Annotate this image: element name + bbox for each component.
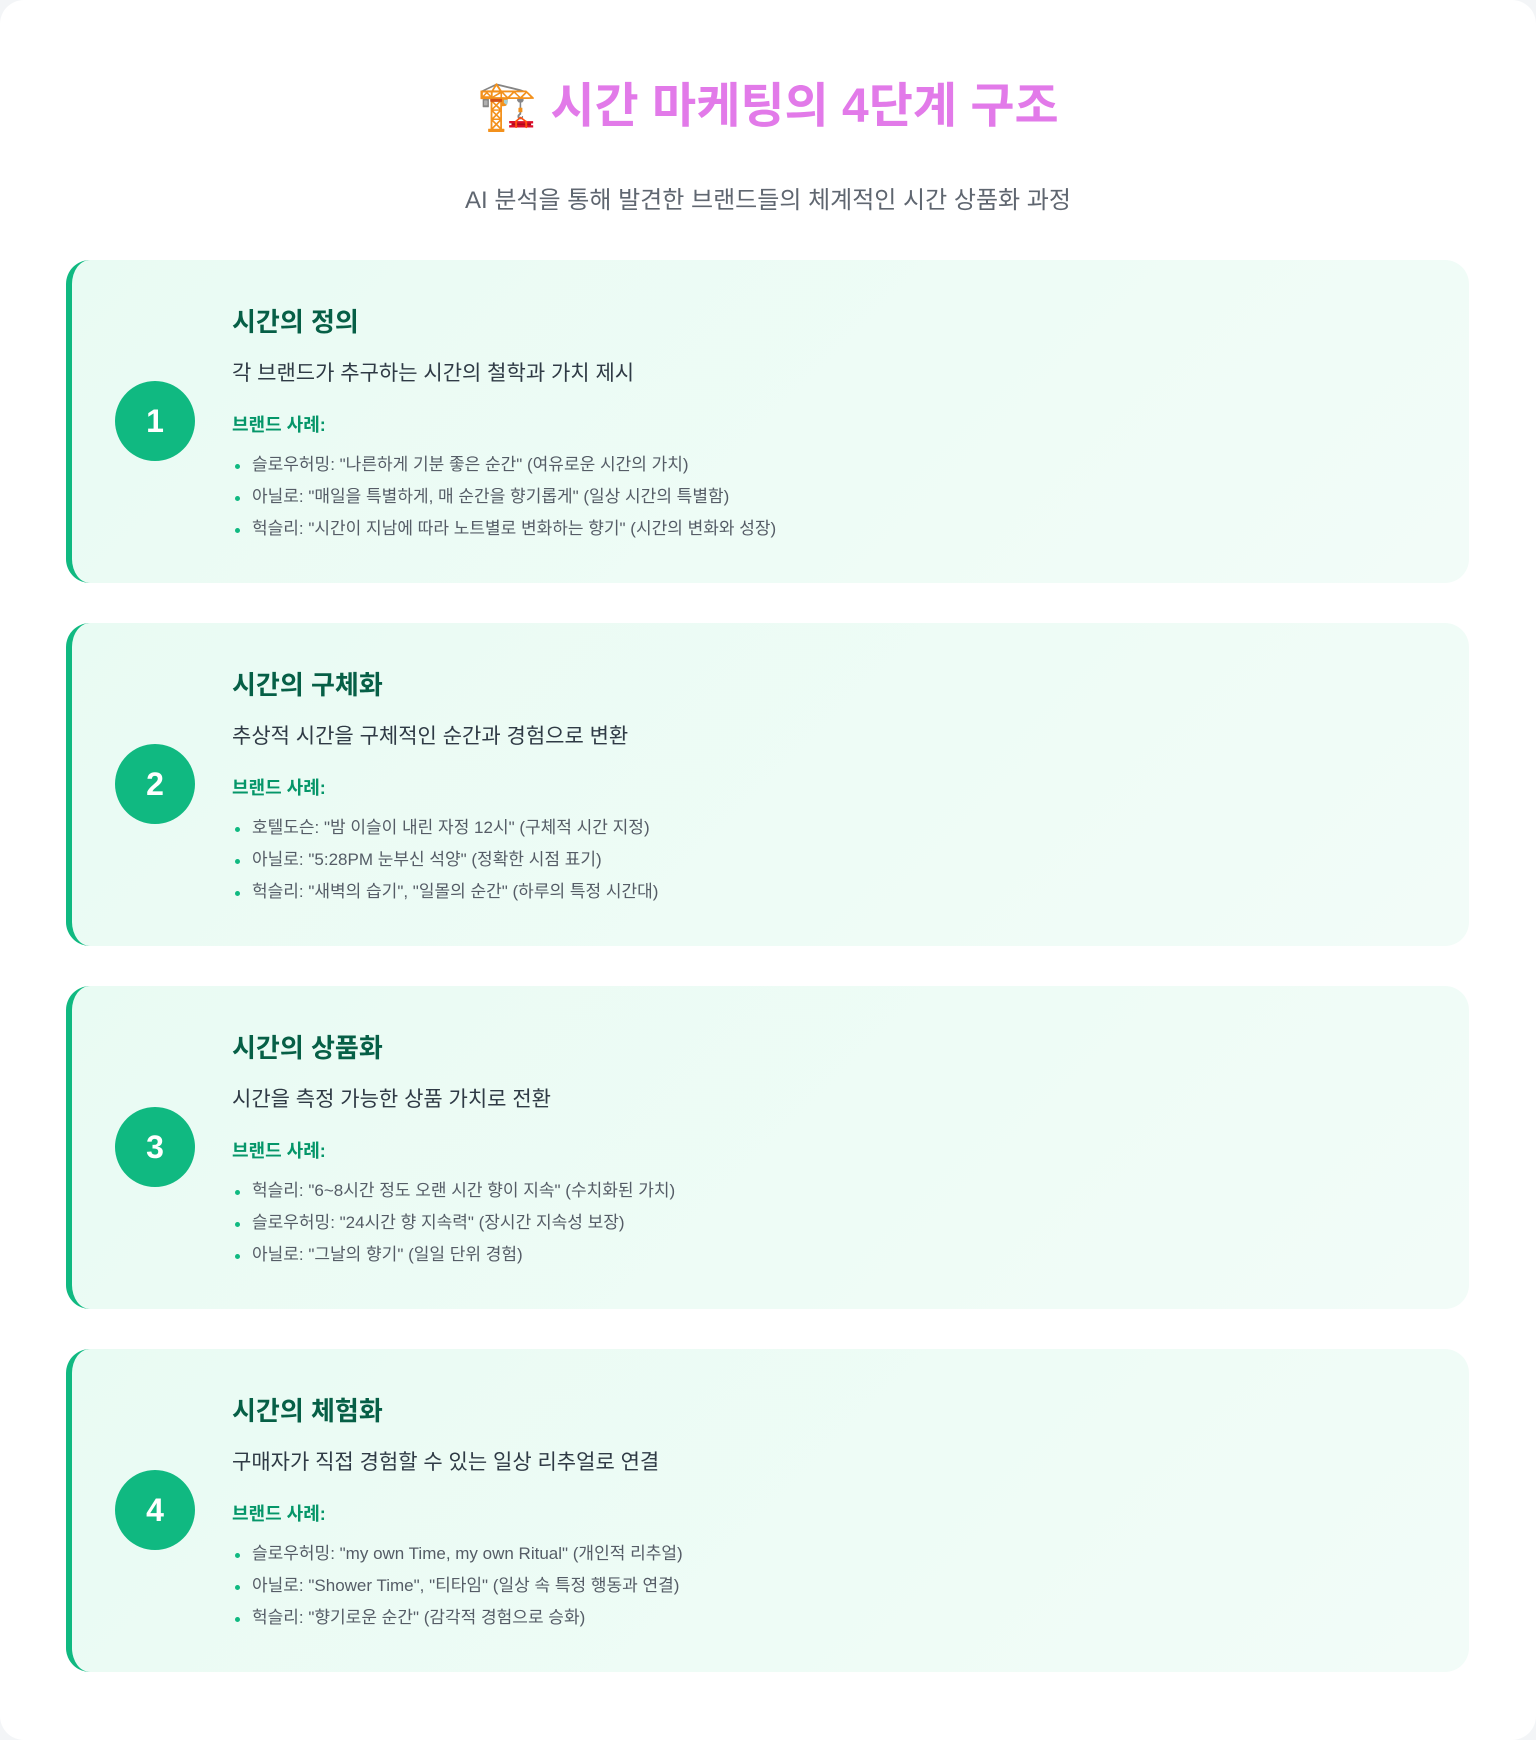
- text block: step 4: 헉슬리: "향기로운 순간" (감각적 경험으로 승화): [252, 1608, 585, 1627]
- text block: step 1: [232, 307, 776, 538]
- text block: step 1: 시간의 정의: [232, 307, 359, 337]
- text block: step 1: 각 브랜드가 추구하는 시간의 철학과 가치 제시: [232, 362, 634, 385]
- subtitle: AI 분석을 통해 발견한 브랜드들의 체계적인 시간 상품화 과정: [465, 187, 1071, 214]
- text block: step 4: 아닐로: "Shower Time", "티타임" (일상 속 특정 행동과 연결): [252, 1576, 679, 1595]
- text block: step 2: 헉슬리: "새벽의 습기", "일몰의 순간" (하루의 특정 시간대): [252, 882, 658, 901]
- text block: step 3: [232, 1033, 675, 1264]
- text block: step 4: 구매자가 직접 경험할 수 있는 일상 리추얼로 연결: [232, 1451, 659, 1474]
- text block: step 2: [232, 670, 658, 901]
- text block: step 3: 아닐로: "그날의 향기" (일일 단위 경험): [252, 1245, 523, 1264]
- text block: step 4: [232, 1396, 683, 1627]
- title: 🏗️ 시간 마케팅의 4단계 구조: [477, 80, 1059, 133]
- text block: step 3: 시간을 측정 가능한 상품 가치로 전환: [232, 1088, 551, 1111]
- icon: number 2: [115, 744, 195, 824]
- panel: step 4: [66, 1349, 1469, 1672]
- text block: step 1: 헉슬리: "시간이 지남에 따라 노트별로 변화하는 향기" (시간의 변화와 성장): [252, 519, 776, 538]
- text block: step 4: 슬로우허밍: "my own Time, my own Ritual" (개인적 리추얼): [252, 1544, 683, 1563]
- icon: number 2: 2: [146, 766, 164, 802]
- text block: step 2: 아닐로: "5:28PM 눈부신 석양" (정확한 시점 표기): [252, 850, 602, 869]
- icon: number 1: 1: [146, 403, 164, 439]
- text block: step 2: 브랜드 사례:: [232, 778, 326, 798]
- panel: step 2: [66, 623, 1469, 946]
- text block: step 1: 슬로우허밍: "나른하게 기분 좋은 순간" (여유로운 시간의 가치): [252, 455, 689, 474]
- text block: step 3: 슬로우허밍: "24시간 향 지속력" (장시간 지속성 보장): [252, 1213, 625, 1232]
- text block: step 3: 시간의 상품화: [232, 1033, 383, 1063]
- icon: number 3: [115, 1107, 195, 1187]
- icon: number 1: [115, 381, 195, 461]
- text block: step 4: 시간의 체험화: [232, 1396, 383, 1426]
- panel: step 3: [66, 986, 1469, 1309]
- icon: number 3: 3: [146, 1129, 164, 1165]
- text block: step 2: 추상적 시간을 구체적인 순간과 경험으로 변환: [232, 725, 628, 748]
- text block: step 1: 아닐로: "매일을 특별하게, 매 순간을 향기롭게" (일상 시간의 특별함): [252, 487, 729, 506]
- icon: number 4: 4: [146, 1492, 164, 1528]
- text block: step 4: 브랜드 사례:: [232, 1504, 326, 1524]
- panel: step 1: [66, 260, 1469, 583]
- text block: step 3: 브랜드 사례:: [232, 1141, 326, 1161]
- text block: step 1: 브랜드 사례:: [232, 415, 326, 435]
- text block: step 2: 호텔도슨: "밤 이슬이 내린 자정 12시" (구체적 시간 지정): [252, 818, 650, 837]
- text block: step 2: 시간의 구체화: [232, 670, 383, 700]
- text block: step 3: 헉슬리: "6~8시간 정도 오랜 시간 향이 지속" (수치화된 가치): [252, 1181, 675, 1200]
- icon: number 4: [115, 1470, 195, 1550]
